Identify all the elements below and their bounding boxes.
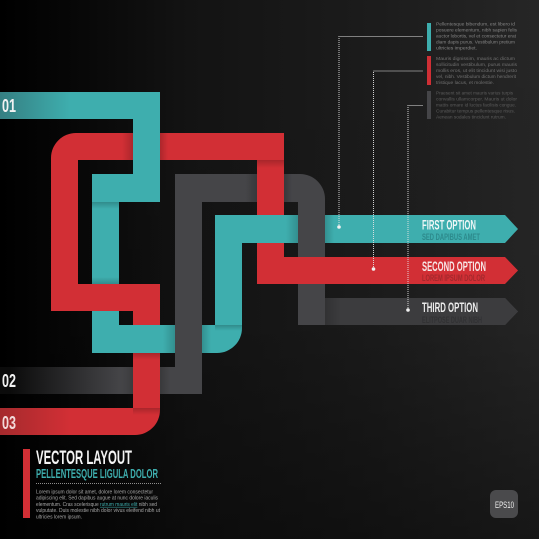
note 2: red marker and text: tristique lacus, et molestie.	[436, 80, 494, 86]
ribbon: teal path 01 to first option	[0, 92, 518, 353]
third option label: ELITPOSE DUAR NIBH	[422, 315, 482, 326]
weave overlaps: red and gray over teal	[92, 215, 325, 353]
first option label: SED DAPIBUS AMET	[422, 232, 480, 243]
note 1: teal marker and text	[427, 22, 518, 52]
ribbon: red path 03 to second option	[0, 133, 518, 435]
note 3: gray marker and text: Praesent sit amet mauris varius turpis	[436, 90, 514, 96]
note 1: teal marker and text: diam dapis purus. Vestibulum pretium	[436, 40, 515, 46]
note 2: red marker and text: mollis eros, ut elit tincidunt wisi justo	[436, 68, 517, 74]
note 1: teal marker and text: Pellentesque bibendum, est libero id	[436, 22, 515, 28]
third option label: THIRD OPTION	[422, 300, 478, 315]
note 1: teal marker and text: auctor lobortis, vel et consectetur erat	[436, 34, 517, 40]
connector: second option	[372, 71, 423, 271]
body text: adipiscing elit. Sed dapibus augue at nunc dolore iaculis	[36, 496, 158, 502]
title block accent bar	[23, 449, 30, 518]
second option label	[422, 259, 486, 284]
label 02: 02	[2, 371, 16, 391]
note 3: gray marker and text: Curabitur tempus pellentesque risus.	[436, 108, 515, 114]
second option label: SECOND OPTION	[422, 259, 486, 274]
note 2: red marker and text	[427, 56, 518, 86]
EPS10 badge: EPS10	[495, 500, 514, 511]
body text	[36, 490, 160, 520]
note 1: teal marker and text: ultricies imperdiet.	[436, 46, 477, 52]
body text: elementum. Cras scelerisque rutrum mauris elit nibh sed	[36, 502, 157, 508]
label 03: 03	[2, 413, 16, 433]
subtitle: PELLENTESQUE LIGULA DOLOR	[36, 467, 158, 481]
connector: first option	[337, 36, 423, 229]
third option label	[422, 300, 482, 326]
ribbon: gray path 02 to third option	[0, 174, 518, 394]
note 3: gray marker and text: mattis ornare id luctus facilisis congue.	[436, 102, 516, 108]
connector: third option	[406, 106, 423, 312]
label 01: 01	[2, 96, 16, 116]
note 2: red marker and text: sollicitudin vestibulum, purus mauris	[436, 62, 518, 68]
body text: ultricies lorem ipsum.	[36, 514, 82, 520]
note 2: red marker and text: Mauris dignissim, mauris ac dictum	[436, 56, 515, 62]
body text: Lorem ipsum dolor sit amet, dolore lorem consectetur	[36, 490, 153, 496]
body text: vulputate. Duis molestie nibh dolor vivus eleifend nibh ut	[36, 508, 160, 514]
note 1: teal marker and text: posuere elementum, nibh sapien felis	[436, 28, 518, 34]
dotted divider	[36, 482, 161, 484]
note 2: red marker and text: vel, nibh. Vestibulum dictum hendrerit	[436, 74, 517, 80]
first option label: FIRST OPTION	[422, 218, 476, 232]
note 3: gray marker and text: convallis ullamcorper. Mauris ut dolor	[436, 96, 517, 102]
first option label	[422, 218, 480, 243]
EPS10 badge	[490, 490, 518, 518]
note 3: gray marker and text: Aenean sodales tincidunt rutrum.	[436, 114, 506, 120]
note 3: gray marker and text	[427, 90, 517, 120]
second option label: LOREM IPSUM DOLOR	[422, 273, 485, 284]
title: VECTOR LAYOUT	[36, 447, 132, 469]
